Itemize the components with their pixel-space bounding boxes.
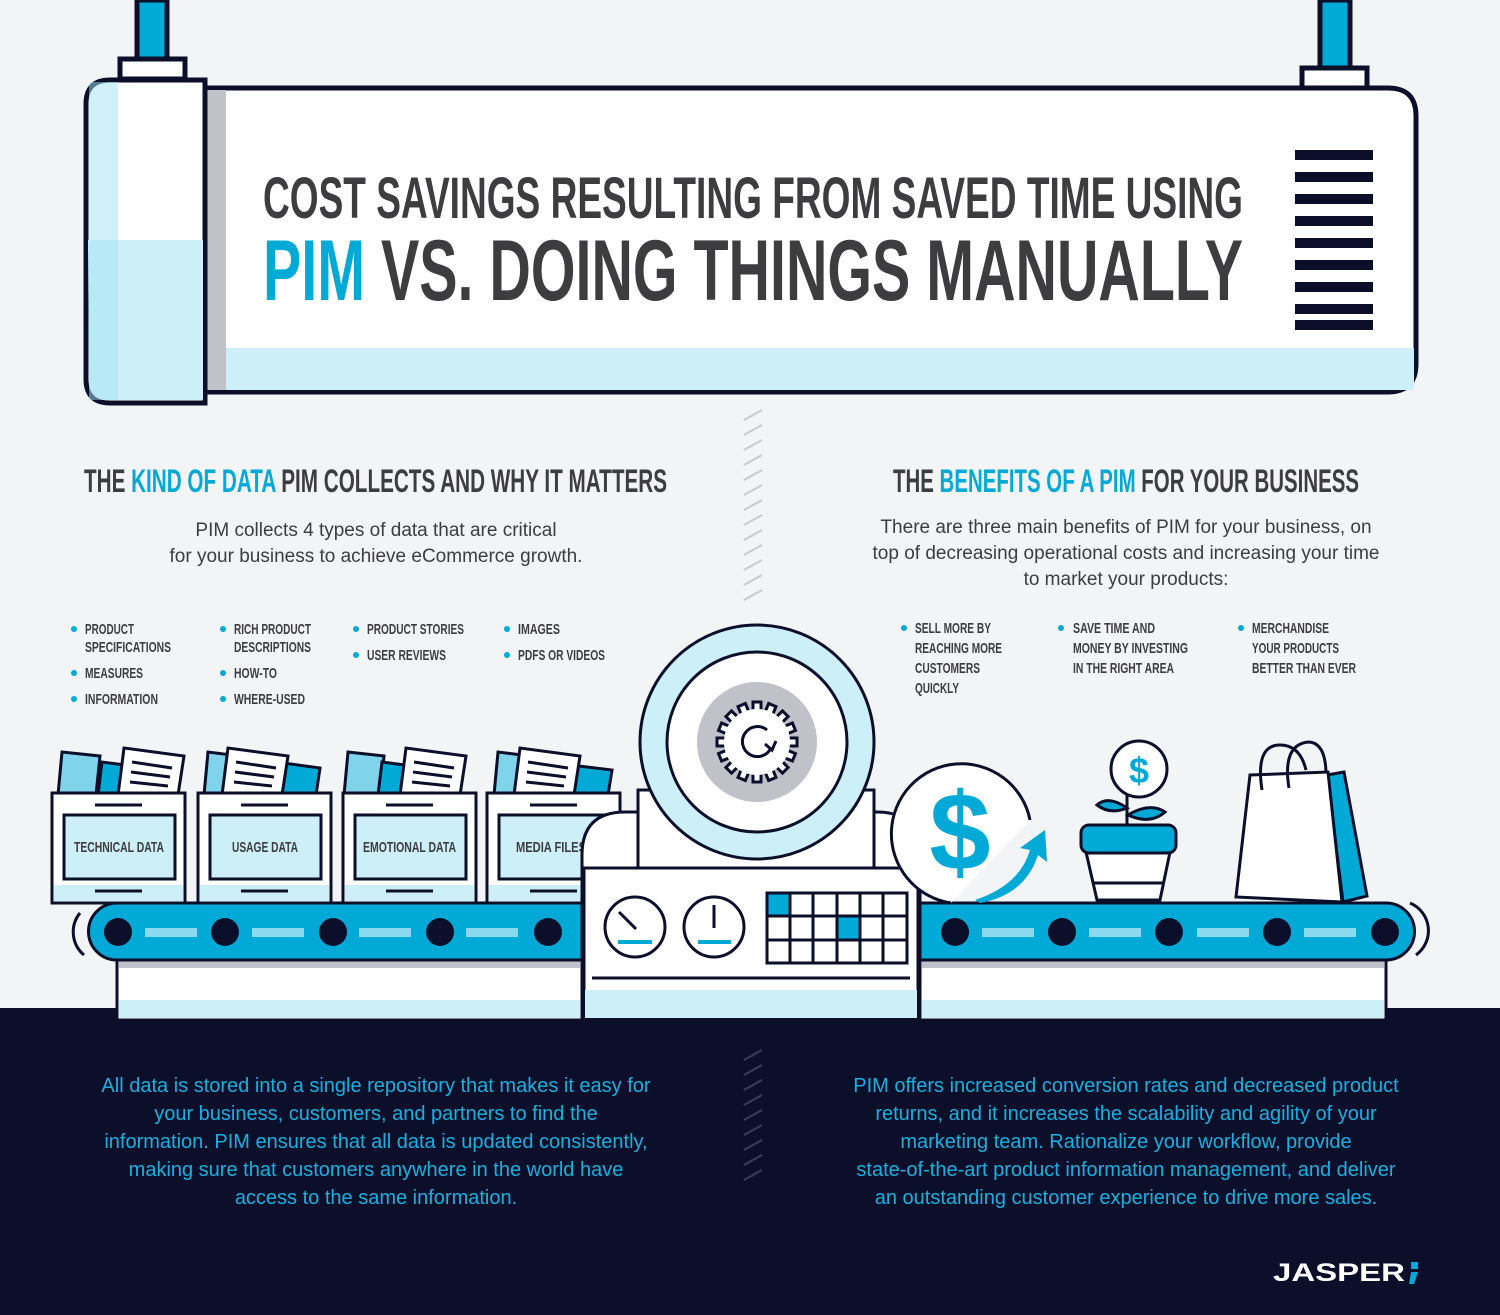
- logo: [1273, 1259, 1418, 1287]
- bottom text left: your business, customers, and partners to find the: [154, 1103, 598, 1125]
- icon: dollar coin with arrow: [891, 764, 1047, 903]
- right conveyor: [915, 903, 1428, 1020]
- bullets left: DESCRIPTIONS: [234, 639, 311, 656]
- bullets right: MONEY BY INVESTING: [1073, 640, 1188, 657]
- bottom text right: an outstanding customer experience to drive more sales.: [875, 1187, 1377, 1209]
- bullets left: PDFS OR VIDEOS: [518, 647, 605, 664]
- bullets left: HOW-TO: [234, 665, 277, 682]
- stripes: [1295, 150, 1373, 330]
- bullets right: IN THE RIGHT AREA: [1073, 660, 1174, 677]
- left conveyor: [73, 903, 590, 1020]
- bullets left: USER REVIEWS: [367, 647, 446, 664]
- bullets left: SPECIFICATIONS: [85, 639, 171, 656]
- dividers: [744, 410, 762, 1180]
- bottom text right: PIM offers increased conversion rates and decreased product: [853, 1075, 1399, 1097]
- icon: gear: [717, 702, 797, 782]
- bullets left: IMAGES: [518, 621, 560, 638]
- data boxes: [52, 748, 620, 903]
- intro left: [170, 520, 582, 567]
- bullets right: QUICKLY: [915, 680, 959, 697]
- bullets right: REACHING MORE: [915, 640, 1002, 657]
- intro left: PIM collects 4 types of data that are critical: [195, 520, 557, 541]
- intro right: to market your products:: [1024, 569, 1228, 590]
- bullets left: WHERE-USED: [234, 691, 305, 708]
- box: usage: USAGE DATA: [232, 839, 298, 856]
- intro right: There are three main benefits of PIM for your business, on: [880, 517, 1372, 538]
- hanging pipes: [120, 0, 1367, 88]
- bullets left: [71, 621, 605, 708]
- box: media: [487, 748, 620, 903]
- bottom text right: [853, 1075, 1399, 1209]
- heading right: THE BENEFITS OF A PIM FOR YOUR BUSINESS: [893, 463, 1359, 499]
- box: technical: TECHNICAL DATA: [74, 839, 164, 856]
- title: [263, 166, 1243, 319]
- intro right: top of decreasing operational costs and increasing your time: [873, 543, 1379, 564]
- box: usage: [198, 748, 331, 903]
- bullets right: YOUR PRODUCTS: [1252, 640, 1339, 657]
- box: emotional: [343, 748, 476, 903]
- bullets right: SAVE TIME AND: [1073, 620, 1155, 637]
- dark footer band: [0, 1008, 1500, 1315]
- bullets left: MEASURES: [85, 665, 143, 682]
- heading left: THE KIND OF DATA PIM COLLECTS AND WHY IT MATTERS: [84, 463, 667, 499]
- bottom text left: [101, 1075, 651, 1209]
- bullets left: INFORMATION: [85, 691, 158, 708]
- box: technical: [52, 748, 185, 903]
- bullets left: PRODUCT: [85, 621, 134, 638]
- bottom text left: making sure that customers anywhere in the world have: [129, 1159, 623, 1181]
- icon: plant pot: [1081, 741, 1176, 900]
- bullets left: RICH PRODUCT: [234, 621, 311, 638]
- box: emotional: EMOTIONAL DATA: [363, 839, 456, 856]
- bullets left: PRODUCT STORIES: [367, 621, 464, 638]
- bottom text left: All data is stored into a single repository that makes it easy for: [101, 1075, 651, 1097]
- bullets right: [901, 620, 1356, 697]
- machine: [582, 625, 920, 1020]
- bottom text left: information. PIM ensures that all data is updated consistently,: [104, 1131, 648, 1153]
- bottom text right: returns, and it increases the scalability and agility of your: [875, 1103, 1377, 1125]
- banner: [86, 80, 1416, 403]
- bullets right: MERCHANDISE: [1252, 620, 1329, 637]
- intro right: [873, 517, 1379, 590]
- icon: shopping bag: [1236, 742, 1367, 902]
- bottom text left: access to the same information.: [235, 1187, 517, 1209]
- bullets right: BETTER THAN EVER: [1252, 660, 1356, 677]
- bullets right: CUSTOMERS: [915, 660, 980, 677]
- icon: dollar coin with arrow: $: [929, 771, 991, 894]
- bullets right: SELL MORE BY: [915, 620, 991, 637]
- intro left: for your business to achieve eCommerce growth.: [170, 546, 582, 567]
- bottom text right: marketing team. Rationalize your workflow, provide: [900, 1131, 1352, 1153]
- logo: JASPER: [1273, 1259, 1405, 1287]
- box: media: MEDIA FILES: [516, 839, 586, 856]
- bottom text right: state-of-the-art product information management, and deliver: [856, 1159, 1396, 1181]
- icon: plant pot: $: [1129, 750, 1149, 791]
